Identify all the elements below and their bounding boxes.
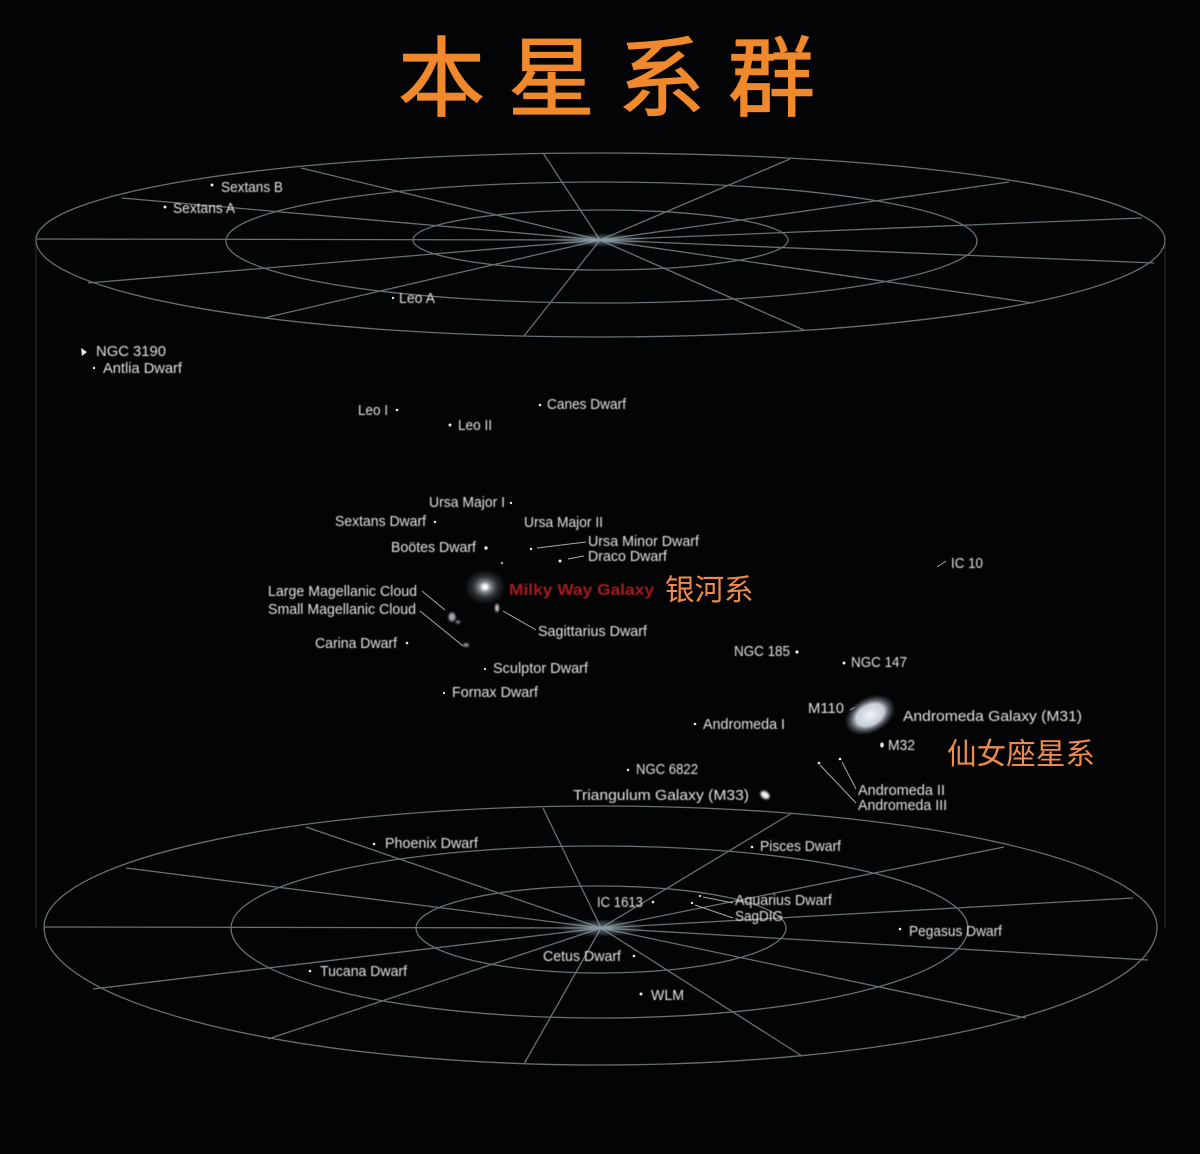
label: Bootes Dwarf: Boötes Dwarf xyxy=(391,540,477,556)
label: WLM: WLM xyxy=(651,988,684,1004)
label: Triangulum Galaxy (M33): Triangulum Galaxy (M33) xyxy=(573,787,749,804)
label: Andromeda II: Andromeda II xyxy=(858,783,945,799)
label: Sextans A: Sextans A xyxy=(173,201,235,217)
label: Bootes Dwarf xyxy=(391,540,503,564)
label: Ursa Major II: Ursa Major II xyxy=(524,515,603,531)
label: Aquarius Dwarf: Aquarius Dwarf xyxy=(735,893,833,909)
label: Cetus Dwarf: Cetus Dwarf xyxy=(543,949,622,965)
label: Tucana Dwarf: Tucana Dwarf xyxy=(320,964,408,980)
label: Large Magellanic Cloud xyxy=(268,584,445,610)
label: NGC 147: NGC 147 xyxy=(851,655,907,671)
Andromeda galaxy xyxy=(838,686,902,744)
label: SagDIG xyxy=(691,902,783,925)
label: IC 1613: IC 1613 xyxy=(597,895,643,911)
title: 本星系群 xyxy=(398,31,838,128)
label: Sextans Dwarf: Sextans Dwarf xyxy=(335,514,427,530)
label: NGC 185: NGC 185 xyxy=(734,644,790,660)
label: NGC 6822: NGC 6822 xyxy=(636,762,698,778)
label: 银河系: 银河系 xyxy=(665,574,754,607)
Milky Way galaxy xyxy=(464,569,506,605)
label: Andromeda I: Andromeda I xyxy=(703,717,785,733)
label: Ursa Major I: Ursa Major I xyxy=(429,495,505,511)
label: SagDIG: SagDIG xyxy=(735,909,783,925)
label: Small Magellanic Cloud: Small Magellanic Cloud xyxy=(268,602,416,618)
label: Small Magellanic Cloud xyxy=(268,602,463,646)
label: Andromeda III: Andromeda III xyxy=(858,798,947,814)
label: Andromeda Galaxy (M31): Andromeda Galaxy (M31) xyxy=(903,708,1082,725)
label: NGC 3190: NGC 3190 xyxy=(96,343,166,360)
Sagittarius dwarf blob xyxy=(495,604,499,612)
label: Pegasus Dwarf: Pegasus Dwarf xyxy=(909,924,1003,940)
label: Andromeda II xyxy=(839,758,945,799)
label: Sagittarius Dwarf: Sagittarius Dwarf xyxy=(538,624,648,640)
label: Pisces Dwarf: Pisces Dwarf xyxy=(760,839,842,855)
Triangulum galaxy xyxy=(759,789,771,801)
label: Draco Dwarf: Draco Dwarf xyxy=(588,549,668,565)
label: M110: M110 xyxy=(808,701,844,717)
label: Leo A: Leo A xyxy=(399,291,435,307)
label: Leo I: Leo I xyxy=(358,403,388,419)
label: Carina Dwarf: Carina Dwarf xyxy=(315,636,398,652)
label: Large Magellanic Cloud: Large Magellanic Cloud xyxy=(268,584,417,600)
label: Canes Dwarf: Canes Dwarf xyxy=(547,397,627,413)
label: Ursa Minor Dwarf: Ursa Minor Dwarf xyxy=(588,534,700,550)
label: Antlia Dwarf: Antlia Dwarf xyxy=(103,361,183,377)
label: IC 10 xyxy=(937,556,983,572)
label: Milky Way Galaxy: Milky Way Galaxy xyxy=(509,582,654,599)
label: 仙女座星系: 仙女座星系 xyxy=(947,738,1095,771)
top disk grid xyxy=(36,153,1165,337)
label: M32: M32 xyxy=(888,738,915,754)
label: Andromeda III xyxy=(818,762,947,814)
label: Ursa Minor Dwarf xyxy=(530,534,700,550)
Magellanic clouds xyxy=(448,612,469,647)
label: IC 10: IC 10 xyxy=(951,556,983,572)
label: Sagittarius Dwarf xyxy=(503,611,648,640)
label: Fornax Dwarf: Fornax Dwarf xyxy=(452,685,539,701)
label: Leo II: Leo II xyxy=(458,418,492,434)
label: Phoenix Dwarf: Phoenix Dwarf xyxy=(385,836,479,852)
label: Sculptor Dwarf: Sculptor Dwarf xyxy=(493,661,589,677)
bottom disk grid xyxy=(44,806,1157,1065)
label: Sextans B: Sextans B xyxy=(221,180,283,196)
cylinder side edges xyxy=(36,240,1165,928)
